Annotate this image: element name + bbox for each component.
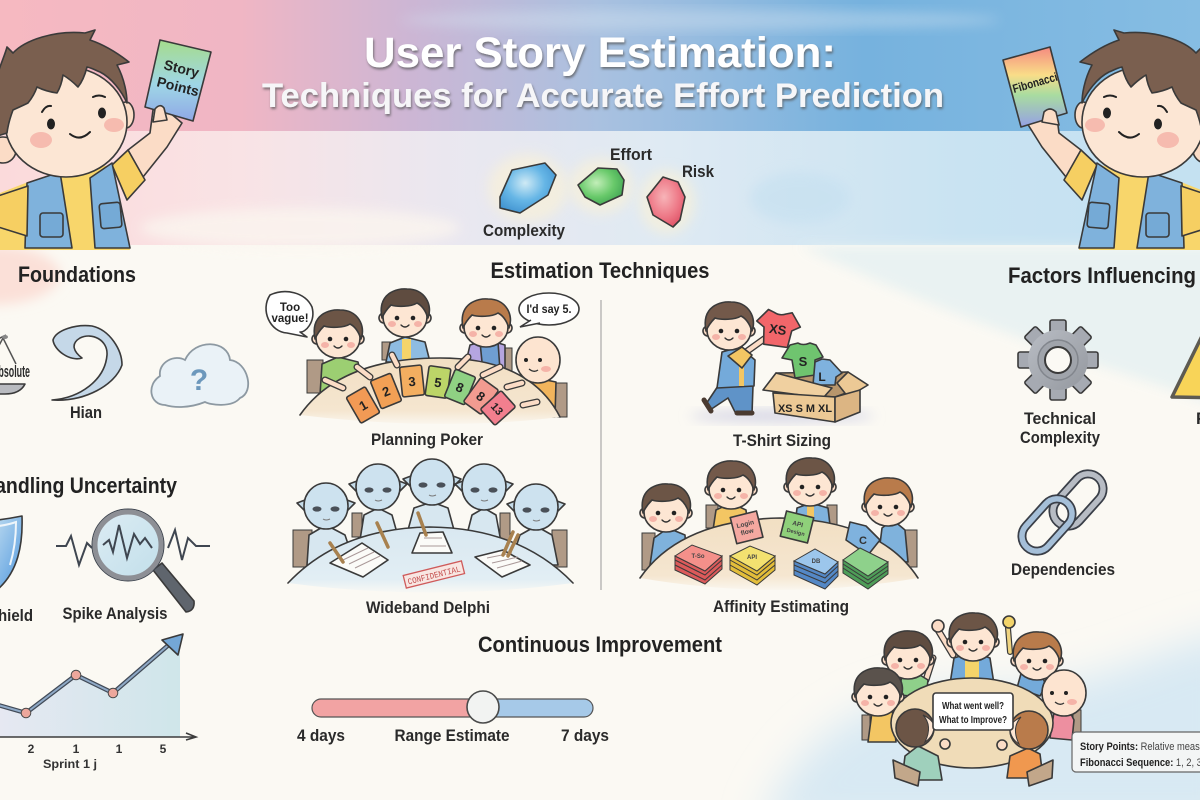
slider: range estimate: 7 days	[561, 726, 609, 745]
shirt: L	[813, 359, 842, 385]
speech bubble: I'd say 5.	[519, 293, 579, 327]
speech bubble: Too vague!: Too	[280, 302, 300, 314]
panel: Planning Poker	[266, 289, 579, 449]
card: Login: Login	[736, 519, 755, 530]
card: Login: flow	[740, 527, 755, 537]
poker cards: 13	[488, 401, 505, 418]
speech bubble: Too vague!	[266, 292, 313, 337]
sign: retrospective questions: What went well?	[942, 700, 1004, 712]
icon: wave swirl: Hian	[70, 403, 102, 422]
box interior	[773, 372, 860, 397]
divider	[600, 300, 602, 590]
box: XS S M XL	[778, 403, 832, 415]
panel: Affinity Estimating: DB	[812, 559, 821, 565]
panel: Wideband Delphi	[288, 459, 573, 617]
panel: Planning Poker: Planning Poker	[371, 430, 483, 449]
illustration: child holding Story Points card	[0, 30, 211, 250]
title	[262, 29, 944, 115]
card: API: API	[791, 520, 804, 529]
panel: T-Shirt Sizing	[690, 302, 874, 450]
shirt: XS: XS	[768, 321, 788, 338]
icon: balance scale	[0, 335, 30, 394]
icon: spike analysis magnifier: Spike Analysis	[62, 604, 168, 623]
papers and pencils	[330, 513, 530, 577]
title: User Story Estimation:	[364, 29, 836, 77]
front seated children	[893, 709, 1053, 786]
icon: gear	[1018, 320, 1100, 447]
panel: foundations icons	[0, 326, 248, 422]
shirt: XS	[754, 308, 802, 349]
gems: complexity, effort, risk: Risk	[682, 162, 714, 181]
icon: gear: Technical	[1024, 409, 1096, 428]
icon: cloud with question mark	[151, 344, 248, 407]
card: Fibonacci	[1003, 47, 1067, 127]
chart: velocity line by sprint: 1	[116, 742, 123, 756]
poker cards: 2	[380, 383, 392, 400]
heading: Estimation Techniques: Estimation Techniques	[490, 258, 710, 283]
gems: complexity, effort, risk: Complexity	[483, 221, 565, 240]
sign: retrospective questions: What to Improve?	[939, 714, 1007, 726]
shirt: L: L	[818, 370, 826, 384]
icon: cloud with question mark: ?	[190, 364, 208, 397]
slider: range estimate	[297, 691, 609, 745]
card: Story Points	[145, 40, 211, 121]
raised arms	[926, 616, 1015, 680]
chart: velocity line by sprint	[0, 634, 196, 771]
shirt: S: S	[799, 354, 808, 369]
card: Story Points: Story	[162, 56, 201, 81]
callout: definitions	[1072, 732, 1200, 772]
shirt: S	[782, 343, 823, 378]
gems: complexity, effort, risk	[483, 145, 714, 240]
heading: Continuous Improvement: Continuous Improvement	[478, 632, 723, 657]
heading: Foundations: Foundations	[18, 262, 136, 287]
poker cards: 8	[454, 379, 466, 396]
sign: retrospective questions	[933, 693, 1013, 730]
card: API	[780, 511, 814, 543]
panel: Wideband Delphi: Wideband Delphi	[366, 598, 490, 617]
title: Techniques for Accurate Effort Prediction	[262, 77, 944, 115]
chart: velocity line by sprint: 1	[73, 742, 80, 756]
stacks of cards	[675, 545, 888, 589]
panel: Affinity Estimating: Affinity Estimating	[713, 597, 849, 616]
panel: Affinity Estimating: T-So	[692, 554, 705, 560]
icon: shield	[0, 516, 33, 625]
illustration: retrospective table	[852, 613, 1086, 786]
stamp: confidential: CONFIDENTIAL	[407, 565, 462, 587]
speech bubble: Too vague!: vague!	[271, 313, 309, 325]
panel: Affinity Estimating: API	[747, 555, 757, 561]
poker cards: 8	[473, 388, 488, 405]
gems: complexity, effort, risk: Effort	[610, 145, 652, 164]
card: API: Design	[786, 528, 806, 538]
speech bubble: I'd say 5.: I'd say 5.	[526, 302, 572, 316]
box	[763, 372, 868, 422]
icon: chain link: Dependencies	[1011, 560, 1115, 579]
icon: wave swirl	[52, 326, 122, 422]
arms	[325, 355, 537, 405]
panel: factors icons	[1011, 320, 1200, 579]
chart: velocity line by sprint: 2	[28, 742, 35, 756]
poker cards: 3	[408, 374, 416, 389]
shirt: C	[846, 522, 880, 555]
shirt: C: C	[859, 535, 867, 547]
chart: velocity line by sprint: Sprint 1 j	[43, 757, 97, 771]
panel: Affinity Estimating	[640, 458, 918, 616]
slider: range estimate: Range Estimate	[394, 726, 510, 745]
poker cards: 5	[433, 375, 443, 390]
card: Login	[730, 511, 763, 544]
chart: velocity line by sprint: 5	[160, 742, 167, 756]
icon: warning triangle	[1172, 334, 1200, 428]
card: Fibonacci: Fibonacci	[1011, 70, 1059, 96]
icon: spike analysis magnifier	[56, 509, 210, 623]
poker cards	[346, 365, 516, 426]
slider: range estimate: 4 days	[297, 726, 345, 745]
poker cards: 1	[356, 397, 370, 414]
illustration: child holding Fibonacci card	[1003, 30, 1200, 250]
icon: gear: Complexity	[1020, 428, 1100, 447]
icon: chain link	[1011, 468, 1115, 579]
card: Story Points: Points	[155, 73, 201, 99]
panel: T-Shirt Sizing: T-Shirt Sizing	[733, 431, 831, 450]
panel: handling uncertainty icons	[0, 509, 210, 625]
